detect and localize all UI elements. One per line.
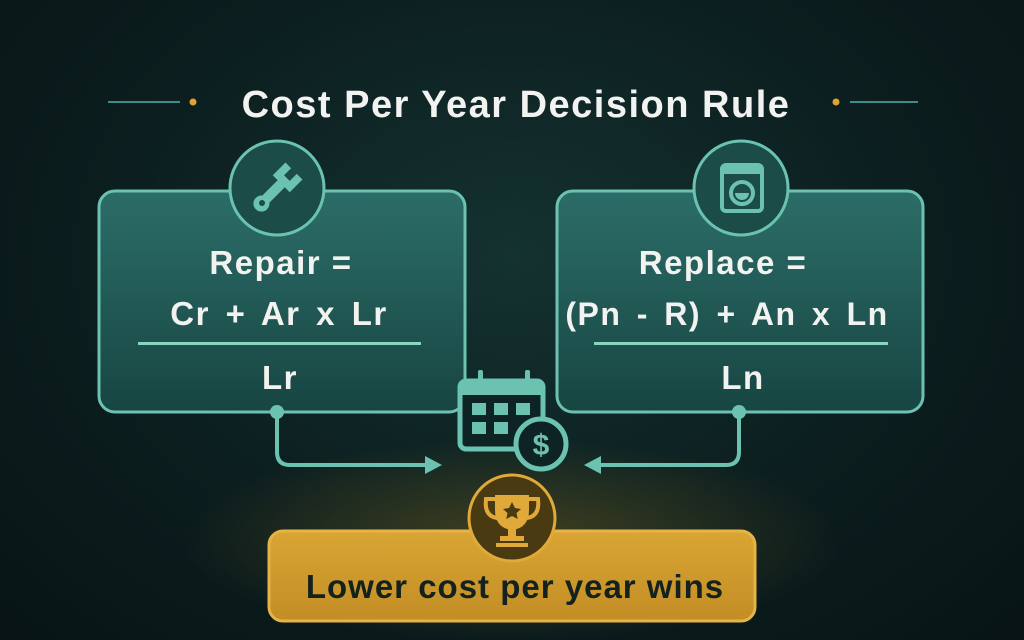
repair formula: Lr	[262, 359, 298, 396]
repair formula	[138, 244, 421, 396]
title: Cost Per Year Decision Rule	[242, 84, 790, 126]
callout: result: Lower cost per year wins	[306, 568, 724, 605]
repair formula: Cr + Ar x Lr	[170, 295, 388, 332]
icon: wrench	[230, 141, 324, 235]
panel: repair	[99, 141, 465, 412]
replace formula	[565, 244, 889, 396]
icon: trophy	[469, 475, 555, 561]
icon: washing machine	[694, 141, 788, 235]
callout: result	[269, 475, 755, 621]
panel: replace	[557, 141, 923, 412]
title	[108, 84, 918, 126]
arrow: repair to center	[270, 405, 442, 474]
replace formula: (Pn - R) + An x Ln	[565, 296, 889, 332]
arrow: replace to center	[584, 405, 746, 474]
replace formula: Ln	[721, 359, 765, 396]
repair formula: Repair =	[209, 244, 353, 281]
icon: calendar with dollar: $	[533, 429, 550, 462]
replace formula: Replace =	[639, 244, 807, 281]
icon: calendar with dollar	[460, 370, 566, 469]
